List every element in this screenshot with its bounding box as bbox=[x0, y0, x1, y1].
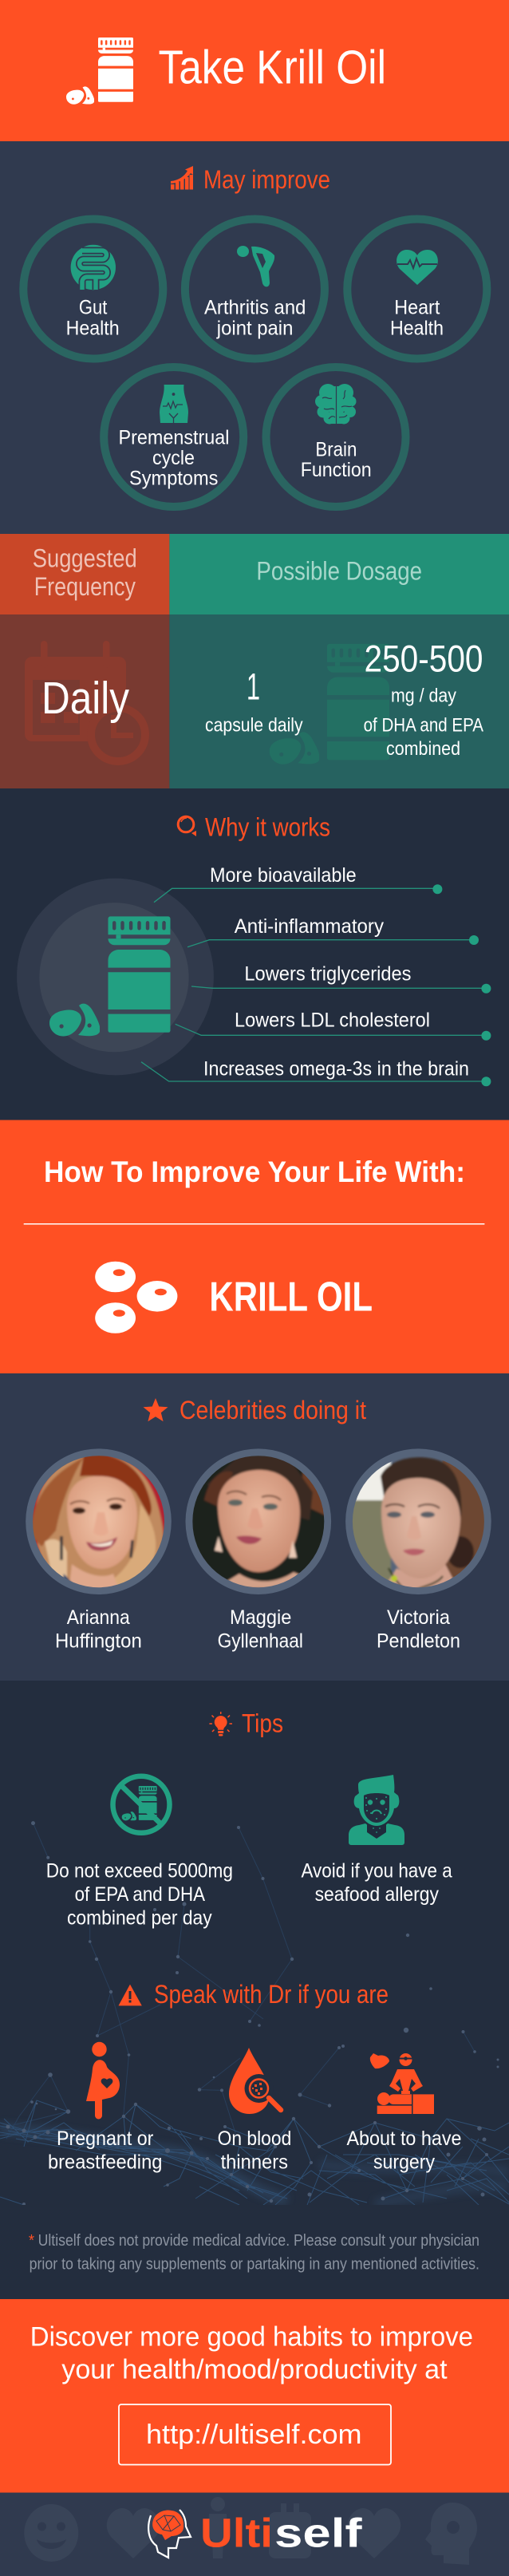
caption: Victoria Pendleton bbox=[377, 1606, 460, 1652]
logo: ultiself: self bbox=[274, 2511, 363, 2556]
heading: suggested frequency bbox=[33, 544, 137, 601]
name: krill oil: KRILL OIL bbox=[209, 1274, 373, 1320]
benefit: arthritis and joint pain: joint pain bbox=[216, 318, 293, 340]
benefit: gut health: Health bbox=[66, 318, 120, 340]
heading: celebrities doing it: Celebrities doing it bbox=[180, 1396, 366, 1424]
heading: speak with doctor: Speak with Dr if you are bbox=[154, 1980, 389, 2009]
benefit: heart health bbox=[347, 219, 487, 359]
dose: capsule count: capsule daily bbox=[205, 715, 303, 737]
panel: call to action bbox=[0, 2299, 509, 2493]
benefit: heart health: Health bbox=[390, 318, 444, 340]
dose: milligrams: 250-500 bbox=[364, 638, 483, 680]
icon: bent person bbox=[237, 246, 274, 286]
icon: surgeon and patient bbox=[370, 2053, 434, 2114]
tip: do not exceed dose: Do not exceed 5000mg bbox=[46, 1859, 233, 1882]
warning: about to have surgery: surgery bbox=[373, 2151, 435, 2174]
caption: Victoria Pendleton: Victoria bbox=[387, 1606, 450, 1629]
callout: increases omega-3s bbox=[141, 1057, 491, 1086]
icon: capsules bbox=[66, 86, 94, 105]
dose: milligrams bbox=[364, 638, 483, 760]
benefit: arthritis and joint pain bbox=[185, 219, 325, 359]
caption: Arianna Huffington: Arianna bbox=[67, 1606, 130, 1629]
disclaimer bbox=[29, 2232, 479, 2273]
portrait: Victoria Pendleton bbox=[345, 1448, 491, 1594]
heading: why it works: Why it works bbox=[205, 812, 330, 841]
tip: do not exceed dose: combined per day bbox=[67, 1907, 212, 1930]
icon: capsules bbox=[49, 1004, 100, 1037]
heading: suggested frequency: Suggested bbox=[33, 544, 137, 573]
text: discover more habits: your health/mood/productivity at bbox=[61, 2354, 448, 2384]
heading: suggested frequency: Frequency bbox=[34, 572, 136, 601]
callout: lowers triglycerides bbox=[191, 963, 491, 994]
benefit: brain function: Brain bbox=[315, 438, 357, 460]
tip: seafood allergy: seafood allergy bbox=[315, 1883, 439, 1906]
icon: three capsules bbox=[95, 1262, 177, 1333]
caption: Arianna Huffington bbox=[55, 1606, 142, 1652]
callout: lowers LDL cholesterol bbox=[176, 1009, 491, 1041]
icons: faded background symbols bbox=[24, 2497, 477, 2565]
button: website url: http://ultiself.com bbox=[146, 2420, 362, 2450]
warning: on blood thinners bbox=[218, 2048, 291, 2174]
icon: magnifier bbox=[178, 816, 196, 836]
caption: Maggie Gyllenhaal bbox=[218, 1606, 303, 1652]
portrait: Maggie Gyllenhaal bbox=[185, 1448, 331, 1594]
icon: abdomen bbox=[160, 385, 188, 423]
benefit: arthritis and joint pain: Arthritis and bbox=[204, 297, 306, 319]
icon: blood drop with magnifier bbox=[229, 2048, 281, 2114]
benefit: heart health: Heart bbox=[394, 297, 440, 319]
heading: possible dosage: Possible Dosage bbox=[256, 557, 422, 586]
callout: increases omega-3s: Increases omega-3s in the brain bbox=[203, 1057, 469, 1080]
tip: do not exceed dose bbox=[46, 1776, 233, 1930]
panel: footer bbox=[0, 2493, 509, 2576]
heading: tips: Tips bbox=[242, 1709, 283, 1738]
icon: rising chart bbox=[171, 166, 193, 190]
warning: on blood thinners: thinners bbox=[221, 2151, 288, 2174]
benefit: gut health bbox=[23, 219, 163, 359]
caption: Arianna Huffington: Huffington bbox=[55, 1630, 142, 1652]
tip: seafood allergy: Avoid if you have a bbox=[302, 1859, 452, 1882]
logo: ultiself: Ulti bbox=[200, 2511, 273, 2556]
icon: bottle bbox=[109, 916, 171, 1033]
panel: possible dosage bbox=[169, 534, 509, 788]
panel: tips and warnings bbox=[0, 1681, 509, 2299]
callout: anti-inflammatory: Anti-inflammatory bbox=[235, 915, 384, 938]
panel: celebrities bbox=[0, 1373, 509, 1681]
callout: more bioavailable bbox=[154, 864, 442, 903]
panel: suggested frequency bbox=[0, 534, 169, 788]
caption: Victoria Pendleton: Pendleton bbox=[377, 1630, 460, 1652]
panel: may improve bbox=[0, 141, 509, 534]
callout: anti-inflammatory bbox=[187, 915, 479, 947]
diagram: bottle in circles bbox=[17, 879, 214, 1075]
logo: ultiself bbox=[148, 2510, 363, 2558]
icon: head with brain network bbox=[148, 2510, 191, 2558]
icon: faded bottle bbox=[327, 644, 389, 760]
icon: heart with pulse bbox=[397, 250, 438, 285]
dose: milligrams: combined bbox=[386, 738, 460, 760]
icon: warning triangle bbox=[118, 1985, 142, 2005]
title: Take Krill Oil bbox=[158, 41, 386, 94]
benefit: brain function: Function bbox=[301, 459, 372, 481]
panel: page header bbox=[0, 0, 509, 141]
warning: about to have surgery bbox=[346, 2053, 461, 2174]
panel: why it works bbox=[0, 788, 509, 1120]
big label: daily: Daily bbox=[41, 673, 129, 724]
icon: intestine bbox=[71, 245, 116, 290]
background: particle network bbox=[0, 1821, 509, 2206]
portrait: Arianna Huffington bbox=[26, 1448, 172, 1594]
heading: may improve: May improve bbox=[203, 165, 330, 194]
heading: how to improve: How To Improve Your Life With: bbox=[44, 1156, 465, 1188]
icon: light bulb bbox=[209, 1712, 232, 1736]
icon: star bbox=[144, 1398, 168, 1421]
warning: pregnant or breastfeeding: Pregnant or bbox=[57, 2128, 153, 2150]
heading: tips bbox=[209, 1709, 283, 1738]
dose: capsule count: 1 bbox=[247, 666, 260, 708]
warning: on blood thinners: On blood bbox=[218, 2128, 291, 2150]
benefit: premenstrual cycle symptoms: Symptoms bbox=[129, 468, 219, 490]
icon: no bottle bbox=[113, 1776, 169, 1833]
dose: capsule count bbox=[205, 666, 303, 737]
callout: more bioavailable: More bioavailable bbox=[210, 864, 357, 887]
caption: Maggie Gyllenhaal: Maggie bbox=[230, 1606, 291, 1629]
text: discover more habits bbox=[30, 2322, 473, 2384]
benefit: premenstrual cycle symptoms: Premenstrual bbox=[118, 426, 230, 448]
callout: lowers triglycerides: Lowers triglycerides bbox=[244, 963, 412, 986]
benefit: gut health: Gut bbox=[79, 297, 107, 319]
tip: seafood allergy bbox=[302, 1775, 452, 1906]
disclaimer: * bbox=[29, 2232, 34, 2250]
warning: about to have surgery: About to have bbox=[346, 2128, 461, 2150]
callout: lowers LDL cholesterol: Lowers LDL cholesterol bbox=[235, 1009, 430, 1032]
dose: milligrams: mg / day bbox=[391, 685, 456, 706]
warning: pregnant or breastfeeding: breastfeeding bbox=[48, 2151, 162, 2174]
panel: how to improve banner bbox=[0, 1120, 509, 1373]
icon: faded capsules bbox=[270, 732, 320, 765]
icon: calendar and clock bbox=[25, 641, 145, 761]
benefit: premenstrual cycle symptoms: cycle bbox=[152, 447, 195, 469]
icon: brain bbox=[315, 384, 356, 425]
button: website url bbox=[119, 2404, 391, 2464]
icon: pregnant woman bbox=[86, 2042, 120, 2120]
caption: Maggie Gyllenhaal: Gyllenhaal bbox=[218, 1630, 303, 1652]
benefit: premenstrual cycle symptoms bbox=[104, 367, 243, 507]
tip: do not exceed dose: of EPA and DHA bbox=[75, 1883, 205, 1906]
benefit: brain function bbox=[266, 367, 405, 507]
icon: supplement bottle bbox=[98, 38, 133, 102]
dose: milligrams: of DHA and EPA bbox=[364, 715, 483, 737]
warning: pregnant or breastfeeding bbox=[48, 2042, 162, 2174]
icon: man with rash bbox=[349, 1775, 404, 1845]
text: discover more habits: Discover more good habits to improve bbox=[30, 2322, 473, 2353]
